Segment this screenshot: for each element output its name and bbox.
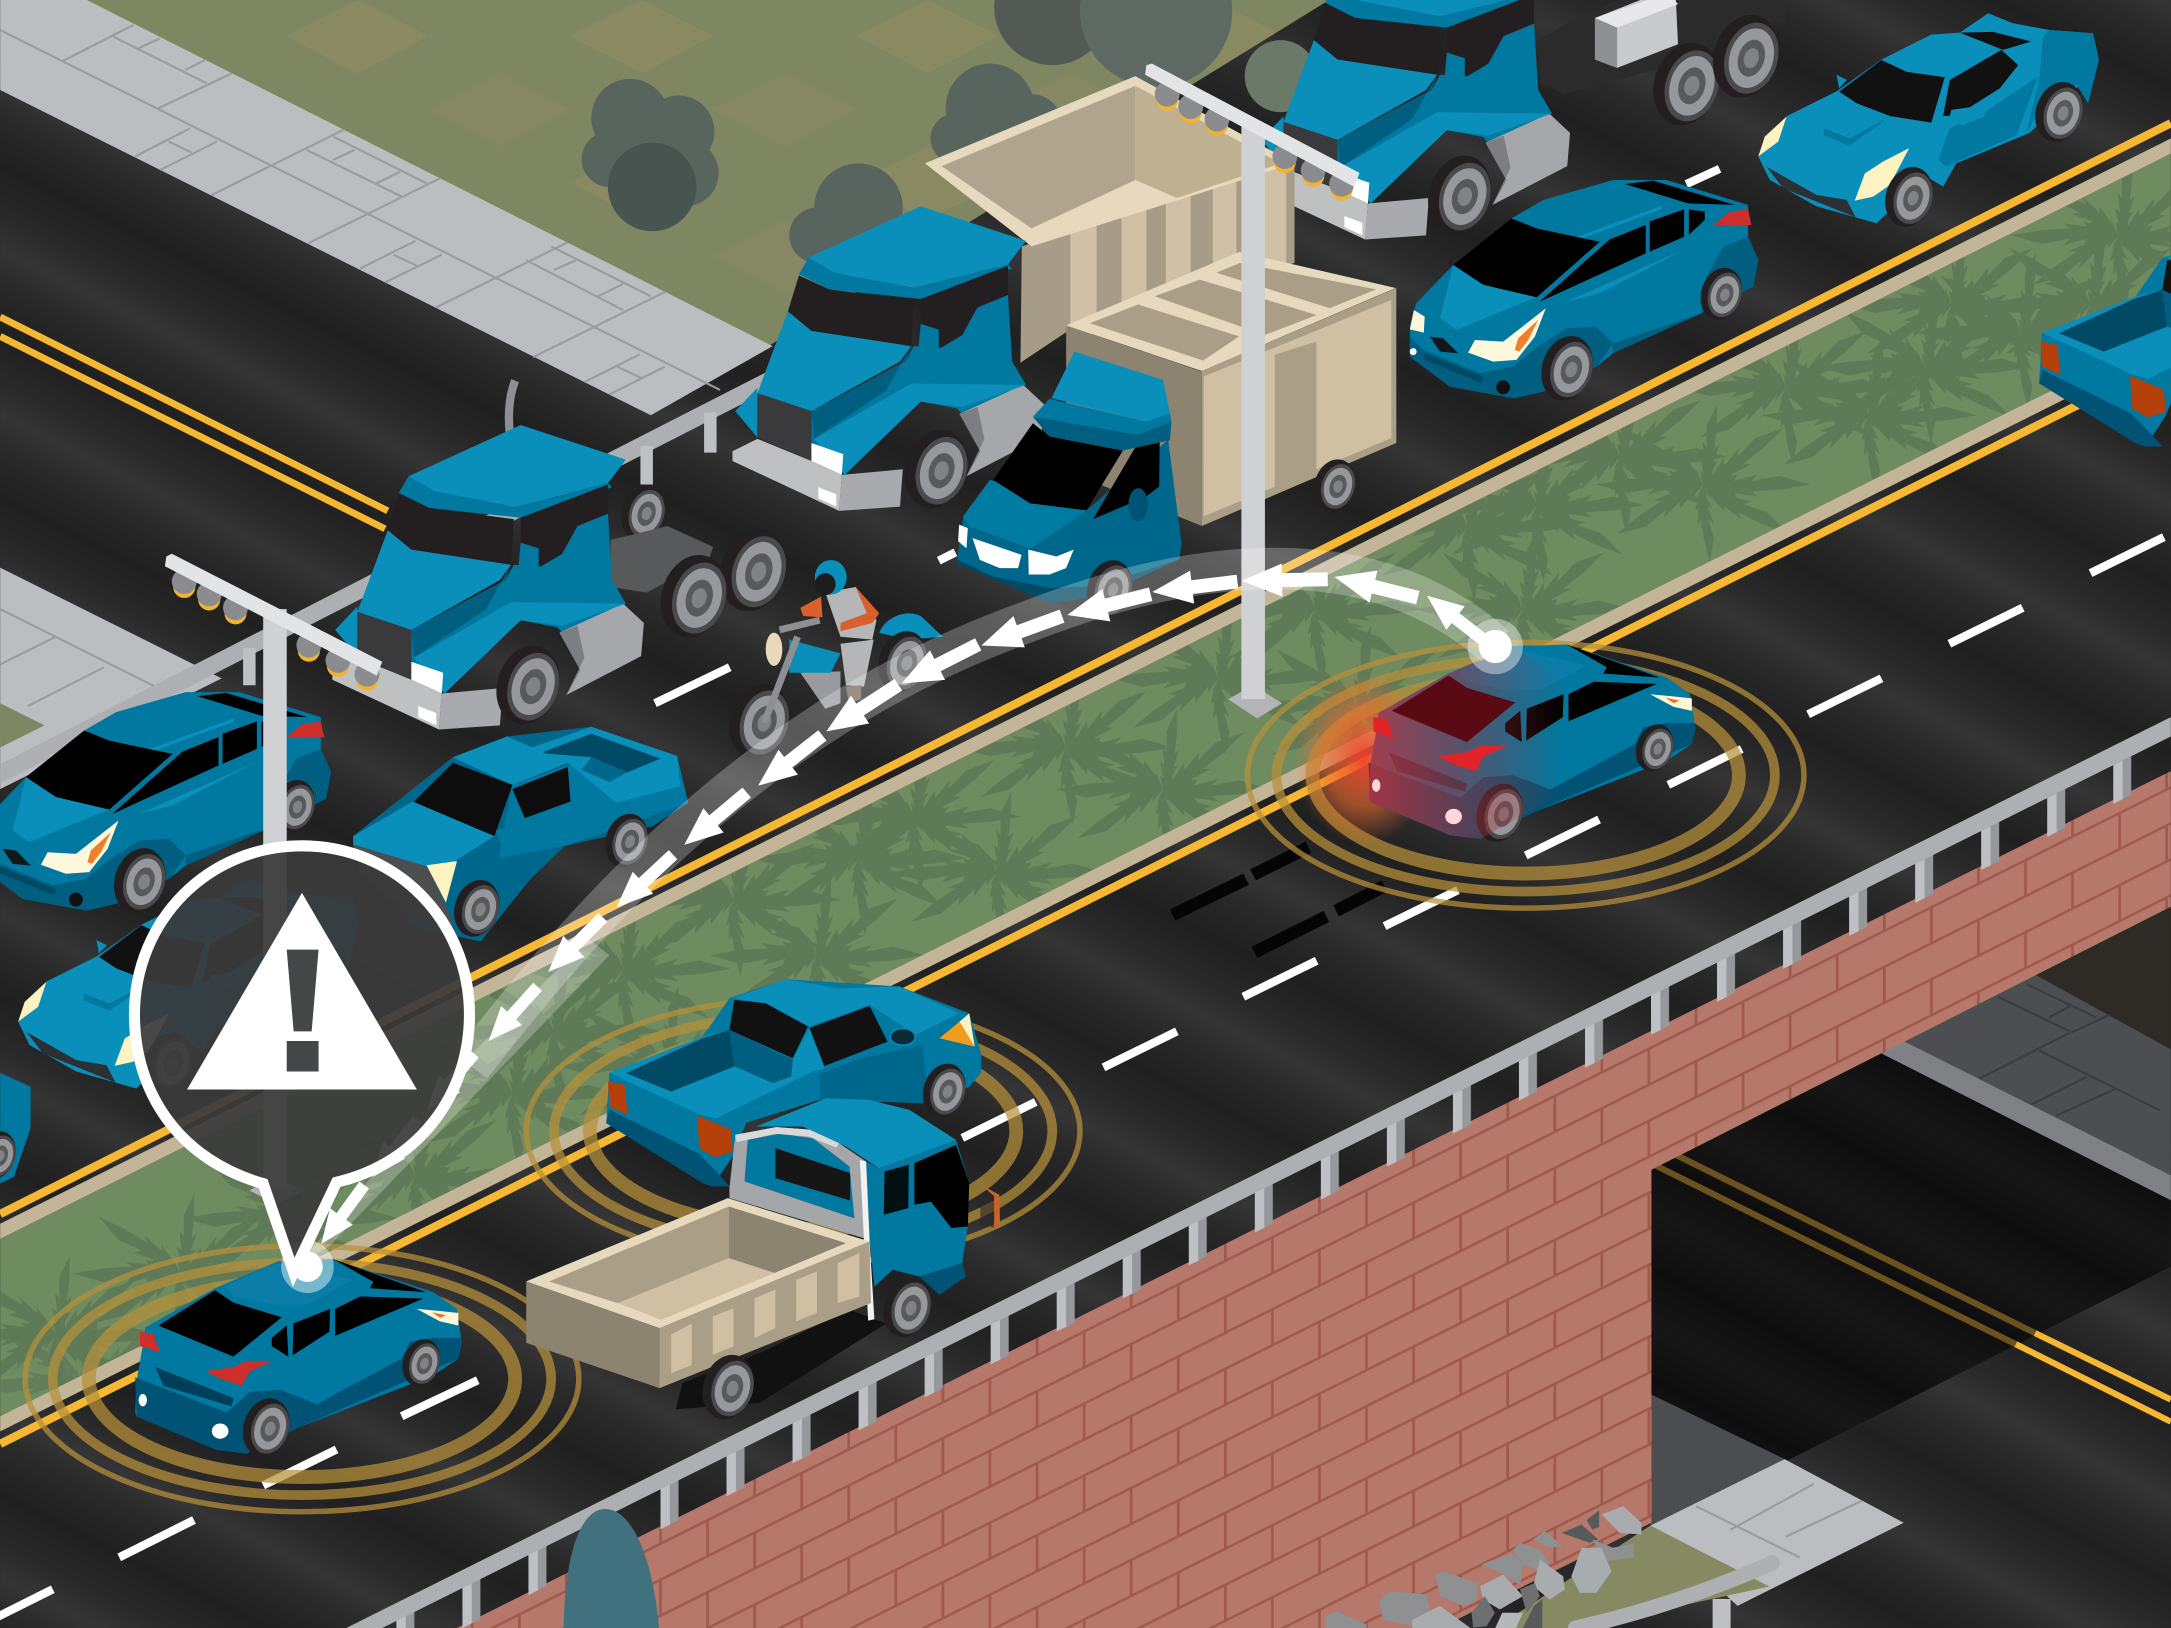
icon: warning triangle — [187, 893, 417, 1089]
communication arrows — [310, 561, 1497, 1252]
communication arc band — [298, 569, 1495, 1267]
tree — [564, 1509, 659, 1628]
motorcycle and rider — [720, 560, 943, 766]
semi truck C top right with rear — [1259, 0, 1789, 242]
warning callout — [134, 846, 469, 1272]
dump truck — [526, 1098, 1000, 1426]
sports car left — [18, 879, 359, 1098]
rock pile — [1325, 1506, 1641, 1628]
van with cargo box — [957, 252, 1396, 623]
red braking car — [1295, 645, 1695, 848]
curved guard rail — [1576, 1563, 1772, 1628]
semi truck B — [732, 206, 1044, 517]
signal node: lower car — [281, 1240, 334, 1293]
pickup front — [353, 727, 688, 943]
bushes — [582, 0, 1317, 263]
lower left car — [135, 1259, 462, 1463]
bridge railing — [346, 717, 2171, 1628]
pickup rear — [606, 979, 981, 1186]
partial car far left — [0, 1073, 31, 1184]
lamp post left — [165, 554, 382, 1204]
semi truck A — [332, 381, 797, 733]
hatchback left — [0, 692, 331, 919]
brick bridge wall — [457, 771, 2171, 1628]
icon: exclamation mark — [287, 950, 319, 1071]
signal node: red car — [1468, 619, 1523, 674]
hatchback top right — [1410, 180, 1758, 407]
overpass railing upper — [0, 371, 768, 792]
crossing road yellow lines — [0, 317, 388, 529]
upper sidewalk — [0, 0, 773, 415]
signal rings: lower left car — [25, 1246, 579, 1512]
sports car top right — [1758, 13, 2099, 233]
pickup far right — [2039, 239, 2171, 446]
lower left sidewalk — [0, 568, 222, 789]
skid marks — [1173, 847, 1385, 952]
signal rings: pickup — [526, 998, 1080, 1264]
grass field — [86, 0, 1329, 346]
under-bridge area — [1495, 907, 2171, 1628]
dump truck B box — [925, 76, 1295, 363]
signal rings: red car — [1247, 642, 1804, 908]
lamp post centre — [1145, 64, 1360, 718]
